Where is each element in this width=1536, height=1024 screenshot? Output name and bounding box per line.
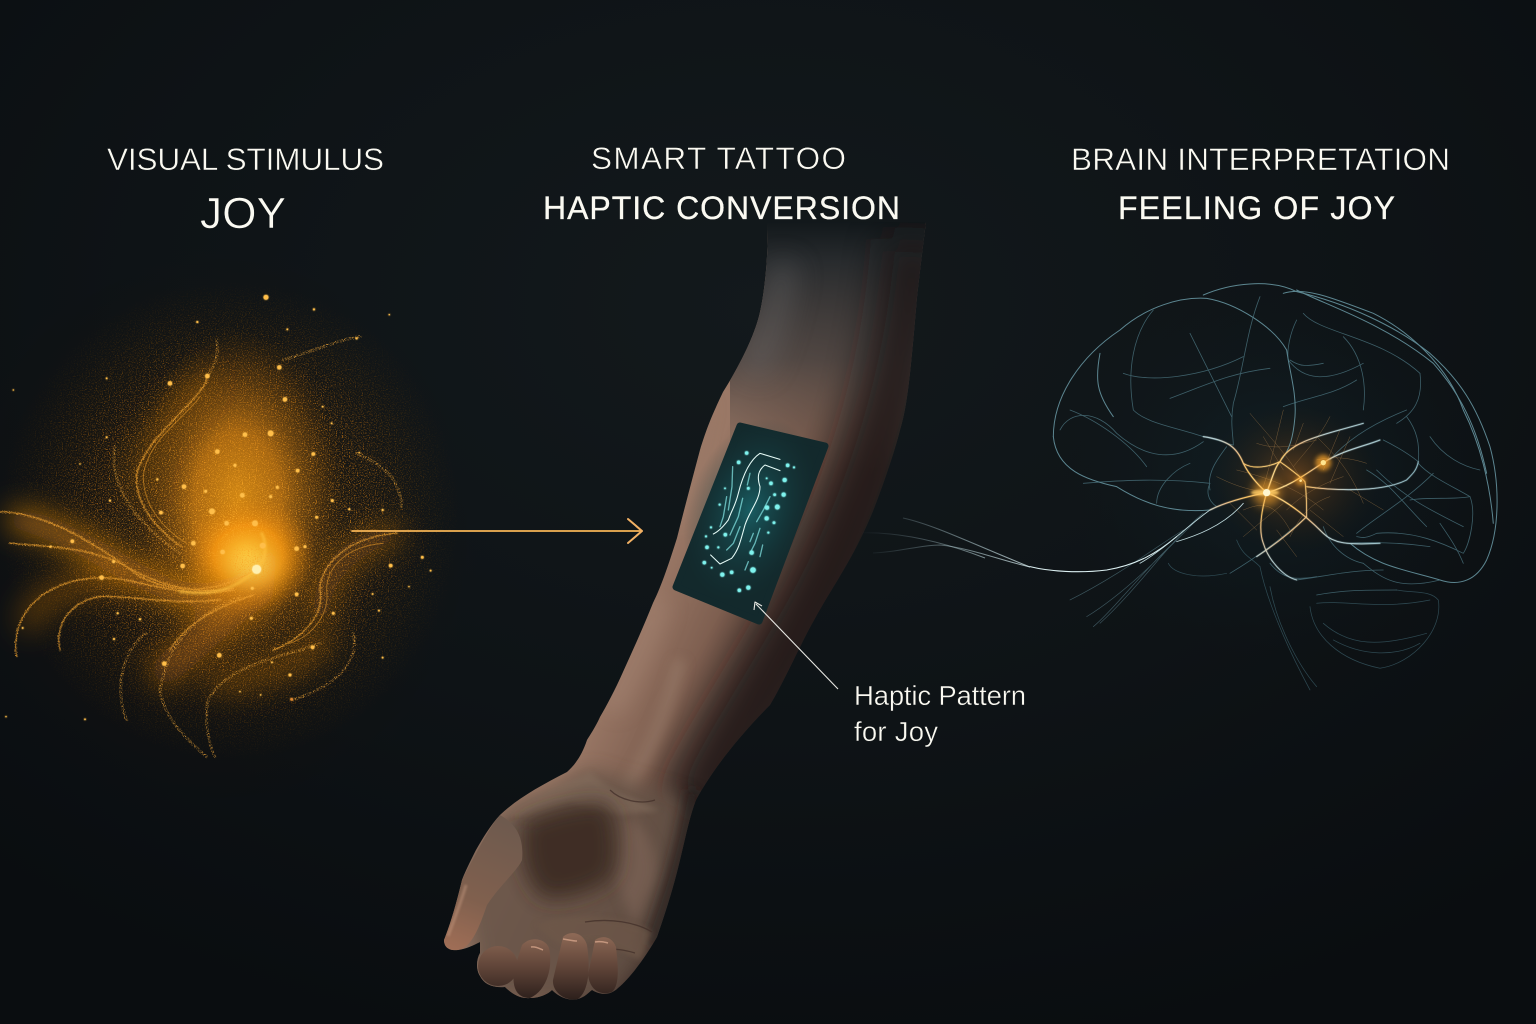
hand tone (460, 770, 690, 1000)
thumb (444, 815, 522, 950)
callout text: Haptic Pattern (854, 680, 1026, 711)
palm shadow (522, 804, 617, 898)
callout text: for Joy (854, 716, 938, 747)
illustration: brain with neural pathways (843, 280, 1497, 690)
panel: visual stimulus heading (107, 141, 384, 238)
particles: glowing golden dots (5, 295, 431, 720)
heading: haptic conversion: HAPTIC CONVERSION (543, 190, 900, 226)
heading: visual stimulus: VISUAL STIMULUS (107, 141, 384, 177)
flame body glow (130, 330, 346, 670)
haptic glowing dots (703, 451, 795, 592)
panel: brain interpretation heading (1071, 141, 1450, 226)
hot pathways fading to teal (1203, 423, 1418, 580)
sparkle grain (0, 280, 460, 760)
arm lighting and shading (460, 210, 950, 1000)
arrow: stimulus to tattoo (352, 519, 642, 543)
fingers (478, 933, 618, 1000)
panel: smart tattoo heading (543, 140, 900, 226)
inner folds (1060, 297, 1480, 595)
brain outline (1053, 284, 1497, 582)
heading: brain interpretation: BRAIN INTERPRETATION (1071, 141, 1450, 177)
fan of fading fibres (1070, 513, 1203, 627)
smart tattoo patch (659, 400, 841, 621)
heading: joy: JOY (200, 189, 286, 238)
illustration: forearm and hand (444, 210, 950, 1000)
teal main nerve (1030, 537, 1177, 572)
heading: smart tattoo: SMART TATTOO (591, 140, 846, 176)
haptic circuit lines (711, 453, 780, 570)
cerebellum and brain stem (1168, 540, 1439, 690)
grainy swirl strands (0, 337, 402, 757)
warm microfibres (1217, 410, 1383, 557)
callout: haptic pattern for joy (754, 602, 1033, 747)
illustration: golden joy particle swirl (0, 245, 480, 815)
heading: feeling of joy: FEELING OF JOY (1118, 190, 1395, 226)
glowing activation nodes (1251, 455, 1331, 507)
callout pointer (754, 602, 838, 689)
incoming nerve from arm (843, 518, 1030, 567)
